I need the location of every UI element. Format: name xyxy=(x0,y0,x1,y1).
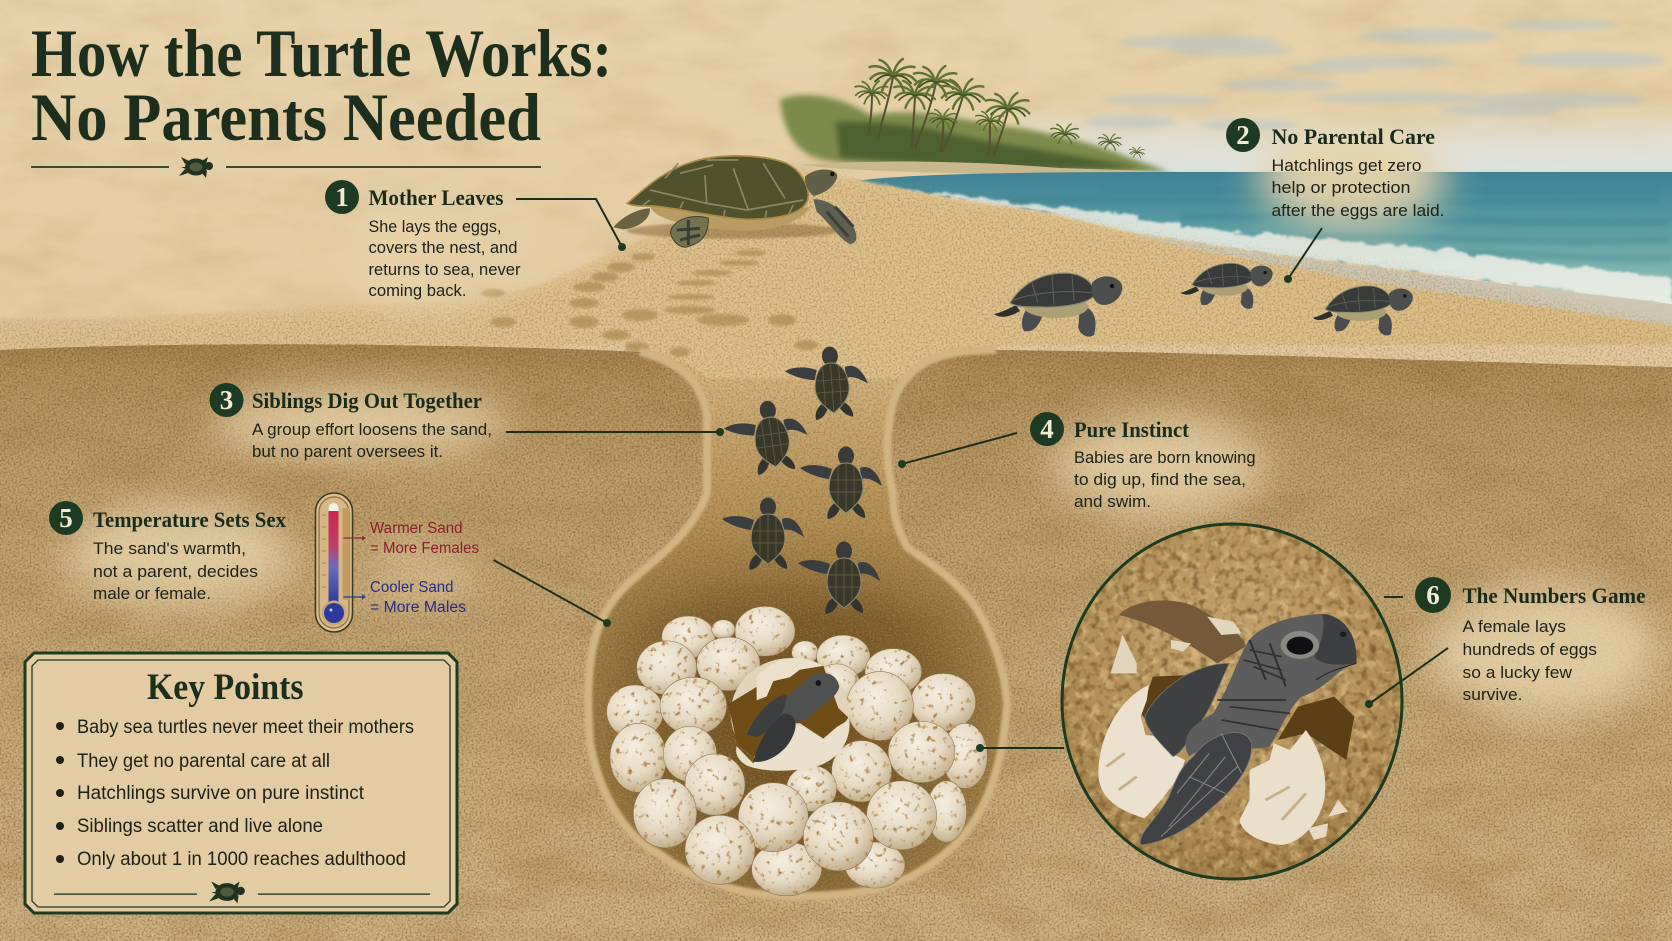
key points list: They get no parental care at all xyxy=(77,751,330,772)
callout 2: No Parental Care: No Parental Care xyxy=(1272,124,1435,149)
callout 4: Pure Instinct: 4 xyxy=(1040,414,1054,444)
callout 4: Pure Instinct: and swim. xyxy=(1074,493,1151,511)
temperature legend: Warmer Sand xyxy=(370,520,462,537)
sea xyxy=(849,172,1672,304)
callout 1: Mother Leaves: She lays the eggs, xyxy=(368,218,502,236)
palm island xyxy=(780,59,1180,175)
key points list: Only about 1 in 1000 reaches adulthood xyxy=(77,849,406,870)
connector from nest to inset xyxy=(976,744,1064,752)
callout 1: Mother Leaves: returns to sea, never xyxy=(368,261,521,279)
callout 5: Temperature Sets Sex: male or female. xyxy=(93,585,211,603)
key points list: Hatchlings survive on pure instinct xyxy=(77,783,365,804)
callout 4: Pure Instinct xyxy=(898,412,1256,511)
callout 3: Siblings Dig Out Together: Siblings Dig Out Together xyxy=(252,388,482,413)
panel: key points xyxy=(25,653,457,913)
digging hatchlings xyxy=(721,344,882,614)
temperature legend: = More Females xyxy=(370,540,479,557)
callout 3: Siblings Dig Out Together: but no parent oversees it. xyxy=(252,443,443,461)
callout 1: Mother Leaves: 1 xyxy=(335,182,349,212)
inset ring xyxy=(1062,524,1402,879)
callout 5: Temperature Sets Sex xyxy=(49,501,611,627)
callout 2: No Parental Care: after the eggs are laid. xyxy=(1272,202,1444,220)
nest interior xyxy=(588,320,1007,896)
temperature legend xyxy=(344,520,479,616)
callout 3: Siblings Dig Out Together: A group effort loosens the sand, xyxy=(252,421,492,439)
key points heading: Key Points xyxy=(147,667,304,708)
title: How the Turtle Works: xyxy=(31,15,612,91)
beach hatchlings xyxy=(994,263,1413,337)
egg clutch xyxy=(607,606,987,896)
callout 3: Siblings Dig Out Together xyxy=(210,383,724,461)
mother turtle xyxy=(613,156,856,247)
callout 1: Mother Leaves: coming back. xyxy=(368,282,466,300)
sky and clouds xyxy=(1020,20,1672,174)
cross-section soil xyxy=(0,344,1672,941)
callout 1: Mother Leaves xyxy=(325,180,626,300)
title divider with turtle icon xyxy=(31,157,541,178)
callout 2: No Parental Care: Hatchlings get zero xyxy=(1272,157,1422,175)
callout 4: Pure Instinct: Babies are born knowing xyxy=(1074,449,1256,467)
callout 3: Siblings Dig Out Together: 3 xyxy=(220,385,233,415)
callout 5: Temperature Sets Sex: 5 xyxy=(59,503,73,533)
key points divider xyxy=(54,882,430,904)
callout 5: Temperature Sets Sex: The sand's warmth, xyxy=(93,540,246,558)
light halos behind text xyxy=(65,128,1660,715)
callout 1: Mother Leaves: covers the nest, and xyxy=(368,239,518,257)
title: No Parents Needed xyxy=(31,79,541,155)
callout 6: The Numbers Game: hundreds of eggs xyxy=(1462,641,1597,659)
title xyxy=(31,15,612,155)
turtle tracks xyxy=(481,250,818,357)
inset magnified hatchling xyxy=(1060,520,1405,882)
beach surface xyxy=(0,170,1672,891)
key points list: Siblings scatter and live alone xyxy=(77,816,323,837)
hatching egg in nest xyxy=(728,658,850,771)
callout 2: No Parental Care xyxy=(1226,118,1444,283)
thermometer xyxy=(316,493,352,632)
callout 6: The Numbers Game: 6 xyxy=(1426,580,1440,610)
callout 5: Temperature Sets Sex: Temperature Sets Sex xyxy=(93,507,286,532)
callout 1: Mother Leaves: Mother Leaves xyxy=(368,185,504,210)
callout 6: The Numbers Game: A female lays xyxy=(1462,618,1566,636)
callout 6: The Numbers Game: so a lucky few xyxy=(1462,664,1572,682)
callout 6: The Numbers Game: survive. xyxy=(1462,686,1522,704)
temperature legend: = More Males xyxy=(370,599,466,616)
temperature legend: Cooler Sand xyxy=(370,579,454,596)
key points list xyxy=(56,717,414,870)
callout 4: Pure Instinct: Pure Instinct xyxy=(1074,417,1190,442)
callout 6: The Numbers Game: The Numbers Game xyxy=(1462,583,1646,608)
key points list: Baby sea turtles never meet their mothers xyxy=(77,717,414,738)
callout 5: Temperature Sets Sex: not a parent, decides xyxy=(93,563,258,581)
callout 2: No Parental Care: 2 xyxy=(1236,120,1250,150)
callout 2: No Parental Care: help or protection xyxy=(1272,179,1410,197)
callout 4: Pure Instinct: to dig up, find the sea, xyxy=(1074,471,1246,489)
callout 6: The Numbers Game xyxy=(1365,577,1646,708)
